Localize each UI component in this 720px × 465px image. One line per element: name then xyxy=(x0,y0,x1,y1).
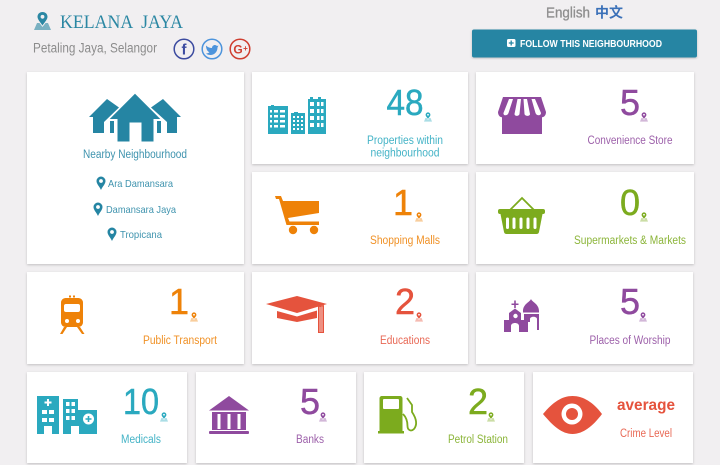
language: English: English xyxy=(546,4,590,22)
icon: houses xyxy=(89,93,181,142)
label: crime level: Crime Level xyxy=(620,428,672,440)
count: 10: 10 xyxy=(123,381,159,422)
button label: FOLLOW THIS NEIGHBOURHOOD xyxy=(520,38,662,50)
icon: small pin xyxy=(639,312,647,322)
label: banks: Banks xyxy=(296,434,324,446)
language: Chinese: 中文 xyxy=(595,4,623,20)
label: properties: neighbourhood xyxy=(370,148,440,160)
icon: hospital xyxy=(37,396,97,434)
language switch xyxy=(546,4,623,22)
nearby: Tropicana xyxy=(108,228,162,241)
label: convenience store: Convenience Store xyxy=(588,135,672,147)
icon: google plus xyxy=(230,39,250,59)
icon: twitter xyxy=(202,39,222,59)
icon: plus square xyxy=(507,39,516,47)
title: KELANA JAYA xyxy=(60,12,183,33)
label: places of worship: Places of Worship xyxy=(590,335,670,347)
panel: supermarkets xyxy=(476,172,694,264)
follow button xyxy=(472,30,697,58)
label: educations: Educations xyxy=(380,335,430,347)
icon: small pin xyxy=(640,112,648,122)
header: neighbourhood title block xyxy=(33,12,250,59)
icon: map pin on map xyxy=(34,12,51,30)
icon: small pin xyxy=(424,112,432,122)
panel: crime level xyxy=(533,372,693,463)
icon: graduation cap xyxy=(266,296,327,333)
icon: train xyxy=(60,296,84,334)
count: 0: 0 xyxy=(620,182,640,223)
icon: store xyxy=(498,97,546,134)
icon: small pin xyxy=(190,312,198,322)
panel: medicals xyxy=(27,372,187,463)
nearby: Damansara Jaya: Damansara Jaya xyxy=(106,204,176,216)
icon: basket xyxy=(498,198,545,234)
nearby: Damansara Jaya xyxy=(94,202,176,216)
icon: google plus: + xyxy=(243,44,248,53)
icon: small pin xyxy=(640,212,648,222)
count: 48: 48 xyxy=(386,82,424,123)
icon: buildings xyxy=(268,97,326,134)
count: 5: 5 xyxy=(620,82,640,123)
label: properties: Properties within xyxy=(367,135,443,147)
label: public transport: Public Transport xyxy=(143,335,218,347)
nearby: Tropicana: Tropicana xyxy=(120,229,162,241)
icon: google plus: G xyxy=(233,42,243,56)
panel: banks xyxy=(196,372,356,463)
icon: facebook: f xyxy=(182,42,188,58)
icon: small pin xyxy=(160,412,168,422)
label: properties xyxy=(367,135,443,160)
panel: nearby neighbourhood xyxy=(27,72,244,264)
panel: places of worship xyxy=(476,272,693,364)
icon: small pin xyxy=(319,412,327,422)
count: 2: 2 xyxy=(468,381,488,422)
count: 1: 1 xyxy=(169,281,189,322)
panel: properties xyxy=(252,72,468,164)
icon: small pin xyxy=(415,312,423,322)
icon: petrol pump xyxy=(378,396,416,434)
panel: public transport xyxy=(27,272,244,364)
label: medicals: Medicals xyxy=(121,434,161,446)
icon: facebook xyxy=(174,39,194,59)
icon: eye xyxy=(543,396,602,434)
location subtitle: Petaling Jaya, Selangor xyxy=(33,40,157,56)
icon: worship buildings xyxy=(504,299,539,332)
count: 2: 2 xyxy=(395,281,415,322)
panel: educations xyxy=(252,272,468,364)
label: supermarkets and markets: Supermarkets & Markets xyxy=(574,235,686,247)
nearby: Ara Damansara: Ara Damansara xyxy=(108,178,173,190)
heading: nearby neighbourhood: Nearby Neighbourhood xyxy=(83,149,187,161)
panel: shopping malls xyxy=(252,172,468,264)
count: 1: 1 xyxy=(393,182,413,223)
nearby: Ara Damansara xyxy=(96,176,173,190)
panel: petrol station xyxy=(364,372,524,463)
icon: small pin xyxy=(415,212,423,222)
count: 5: 5 xyxy=(620,281,640,322)
panel: convenience store xyxy=(476,72,694,164)
icon: small pin xyxy=(487,412,495,422)
icon: cart xyxy=(275,196,319,234)
icon: bank xyxy=(209,396,249,434)
label: petrol station: Petrol Station xyxy=(448,434,508,446)
count: 5: 5 xyxy=(300,381,320,422)
label: shopping malls: Shopping Malls xyxy=(370,235,440,247)
value: average: average xyxy=(617,397,675,414)
